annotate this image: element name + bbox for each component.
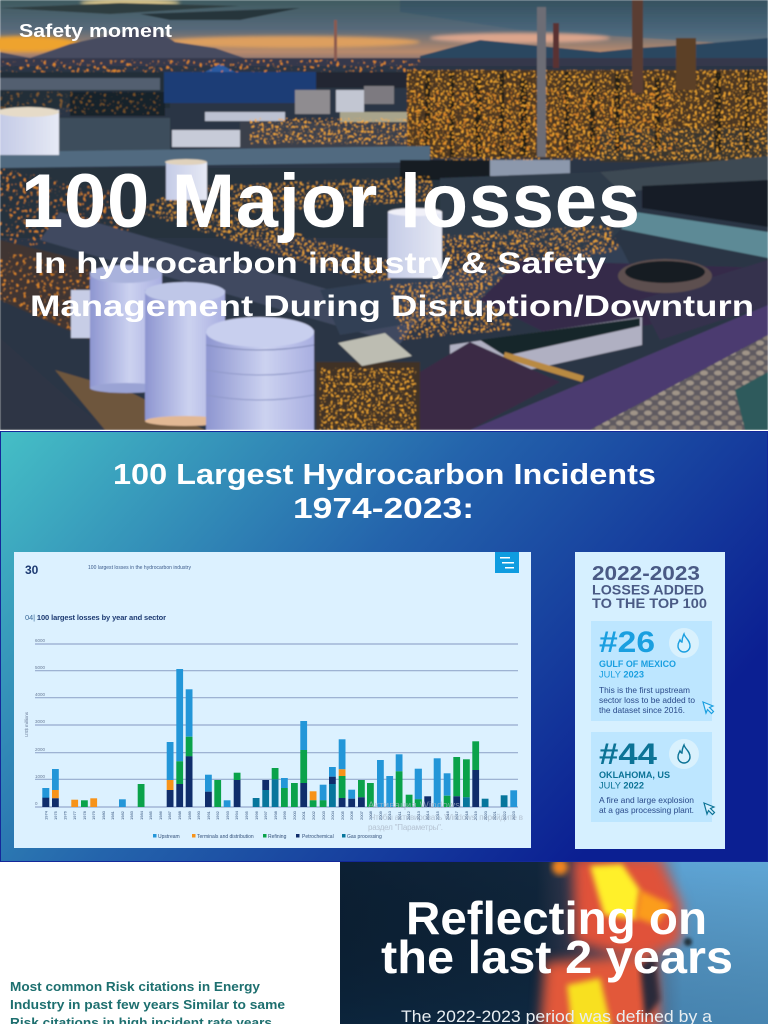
subheading: line one: In hydrocarbon industry & Safety <box>34 247 606 280</box>
icon: flame <box>669 739 699 769</box>
refinery block right <box>407 70 768 158</box>
card heading: 2022-2023 <box>592 563 700 585</box>
callout: rank 44: JULY 2022 <box>599 780 644 790</box>
photo: refinery at dusk <box>0 0 768 430</box>
heading: the last 2 years: the last 2 years <box>381 931 733 983</box>
bar chart: losses by year and sector: US$ millions <box>24 711 29 737</box>
bar chart: losses by year and sector: 5000 <box>35 665 46 670</box>
heading: date range: 1974-2023: <box>293 493 474 525</box>
bar chart: losses by year and sector: 1000 <box>35 774 46 779</box>
page number: 30 <box>25 563 39 577</box>
callout: rank 44: at a gas processing plant. <box>599 805 694 815</box>
year axis labels: 1998 <box>273 810 278 820</box>
callout: rank 44 <box>591 732 714 822</box>
panel: risk citations text <box>0 862 340 1024</box>
year axis labels: 1993 <box>225 810 230 820</box>
bar chart: losses by year and sector: 0 <box>35 801 38 806</box>
year axis labels: 2020 <box>483 810 488 820</box>
photo: fire and smoke <box>340 858 768 1024</box>
chart title: 04| 100 largest losses by year and sector <box>25 613 166 622</box>
watermark: windows activation notice: Чтобы активировать Windows, перейдите в <box>370 813 523 822</box>
legend: Petrochemical <box>302 834 334 840</box>
year axis labels: 2000 <box>292 810 297 820</box>
year axis labels: 2016 <box>445 810 450 820</box>
year axis labels: 1975 <box>53 810 58 820</box>
callout: rank 44: OKLAHOMA, US <box>599 770 670 780</box>
legend: Refining <box>268 834 287 840</box>
big tanks <box>90 272 162 388</box>
text block: risk citations: Most common Risk citations in Energy <box>10 979 261 994</box>
watermark: windows activation notice: раздел "Параметры". <box>368 823 443 832</box>
year axis labels: 1995 <box>244 810 249 820</box>
heading: 100 Major losses: 100 Major losses <box>21 159 640 244</box>
text block: risk citations <box>10 979 285 1024</box>
year axis labels: 2023 <box>511 810 516 820</box>
year axis labels: 2010 <box>387 810 392 820</box>
bar chart: losses by year and sector <box>24 638 518 807</box>
panel: refinery photo hero <box>0 0 768 430</box>
year axis labels: 1987 <box>167 810 172 820</box>
year axis labels: 2011 <box>397 811 402 820</box>
text block: risk citations: Industry in past few years Similar to same <box>10 997 285 1012</box>
year axis labels: 2008 <box>368 810 373 820</box>
year axis labels: 1985 <box>148 810 153 820</box>
icon: cursor arrow <box>703 702 714 714</box>
year axis labels: 1982 <box>120 810 125 820</box>
year axis labels: 1996 <box>254 810 259 820</box>
year axis labels: 2003 <box>321 810 326 820</box>
legend: Upstream <box>158 834 180 840</box>
year axis labels: 1997 <box>263 810 268 820</box>
year axis labels: 1981 <box>110 810 115 820</box>
year axis labels: 1983 <box>129 810 134 820</box>
year axis labels: 2006 <box>349 810 354 820</box>
year axis labels: 1984 <box>139 810 144 820</box>
year axis labels: 2012 <box>406 810 411 820</box>
mid yard <box>0 146 430 168</box>
year axis labels: 2004 <box>330 810 335 820</box>
card heading: LOSSES ADDED <box>592 582 704 598</box>
year axis labels: 2018 <box>464 810 469 820</box>
bar chart: losses by year and sector: 4000 <box>35 692 46 697</box>
heading: 100 Largest Hydrocarbon Incidents: 100 Largest Hydrocarbon Incidents <box>113 459 656 491</box>
small tanks <box>0 110 59 155</box>
year axis labels: 2002 <box>311 810 316 820</box>
year axis labels: 2013 <box>416 810 421 820</box>
panel: reflecting on the last 2 years <box>340 858 768 1024</box>
subheading: line two: Management During Disruption/Downturn <box>30 290 754 323</box>
year axis labels: 2021 <box>492 810 497 820</box>
bar chart: losses by year and sector: 6000 <box>35 638 46 643</box>
watermark: windows activation notice <box>368 800 523 832</box>
label: Safety moment: Safety moment <box>19 21 172 41</box>
yard buildings <box>316 362 420 430</box>
year axis labels: 1994 <box>234 810 239 820</box>
watermark: windows activation notice: Активация Windows <box>368 800 460 811</box>
card heading: TO THE TOP 100 <box>592 596 707 611</box>
running header: 100 largest losses in the hydrocarbon industry <box>88 565 192 571</box>
year axis labels: 2022 <box>502 810 507 820</box>
panel: losses added card <box>575 552 725 849</box>
icon: menu button <box>495 552 519 573</box>
icon: cursor arrow <box>704 803 714 814</box>
card heading <box>592 563 707 611</box>
year axis labels: 2014 <box>425 810 430 820</box>
legend: Terminals and distribution <box>197 834 254 840</box>
legend <box>153 834 382 840</box>
year axis labels: 2001 <box>301 810 306 820</box>
callout: rank 44: A fire and large explosion <box>599 795 694 805</box>
bar chart: losses by year and sector: 2000 <box>35 747 46 752</box>
long building <box>448 316 644 370</box>
year axis labels: 1988 <box>177 810 182 820</box>
callout: rank 26 <box>591 621 714 721</box>
callout: rank 26: the dataset since 2016. <box>599 705 685 715</box>
panel: bar chart page <box>14 552 531 848</box>
callout: rank 26: JULY 2023 <box>599 670 644 680</box>
year axis labels: 1974 <box>44 810 48 820</box>
heading: reflecting on: Reflecting on <box>406 892 707 944</box>
year axis labels: 2009 <box>378 810 383 820</box>
year axis labels: 1990 <box>196 810 201 820</box>
year axis labels: 1979 <box>91 810 96 820</box>
year axis labels: 1986 <box>158 810 163 820</box>
year axis labels: 2015 <box>435 810 440 820</box>
callout: rank 26: GULF OF MEXICO <box>599 659 676 669</box>
year axis labels: 1977 <box>72 810 77 820</box>
callout: rank 26: #26 <box>599 626 655 659</box>
year axis labels: 1980 <box>101 810 106 820</box>
year axis labels: 1999 <box>282 810 287 820</box>
callout: rank 26: This is the first upstream <box>599 685 690 695</box>
callout: rank 26: sector loss to be added to <box>599 695 695 705</box>
icon: flame <box>669 628 699 658</box>
year axis labels <box>44 810 516 820</box>
year axis labels: 1992 <box>215 810 220 820</box>
bar chart: losses by year and sector: 3000 <box>35 719 46 724</box>
year axis labels: 2005 <box>340 810 345 820</box>
year axis labels: 2017 <box>454 810 459 820</box>
year axis labels: 1976 <box>62 810 68 820</box>
panel: 100 largest incidents band <box>0 432 768 862</box>
legend: Gas processing <box>347 834 382 840</box>
far plant left <box>0 72 170 108</box>
year axis labels: 2019 <box>473 810 478 820</box>
year axis labels: 1991 <box>206 810 211 820</box>
year axis labels: 2007 <box>359 810 364 820</box>
callout: rank 44: #44 <box>599 738 657 771</box>
year axis labels: 1989 <box>187 810 192 820</box>
clarifier <box>618 259 712 293</box>
year axis labels: 1978 <box>82 810 87 820</box>
